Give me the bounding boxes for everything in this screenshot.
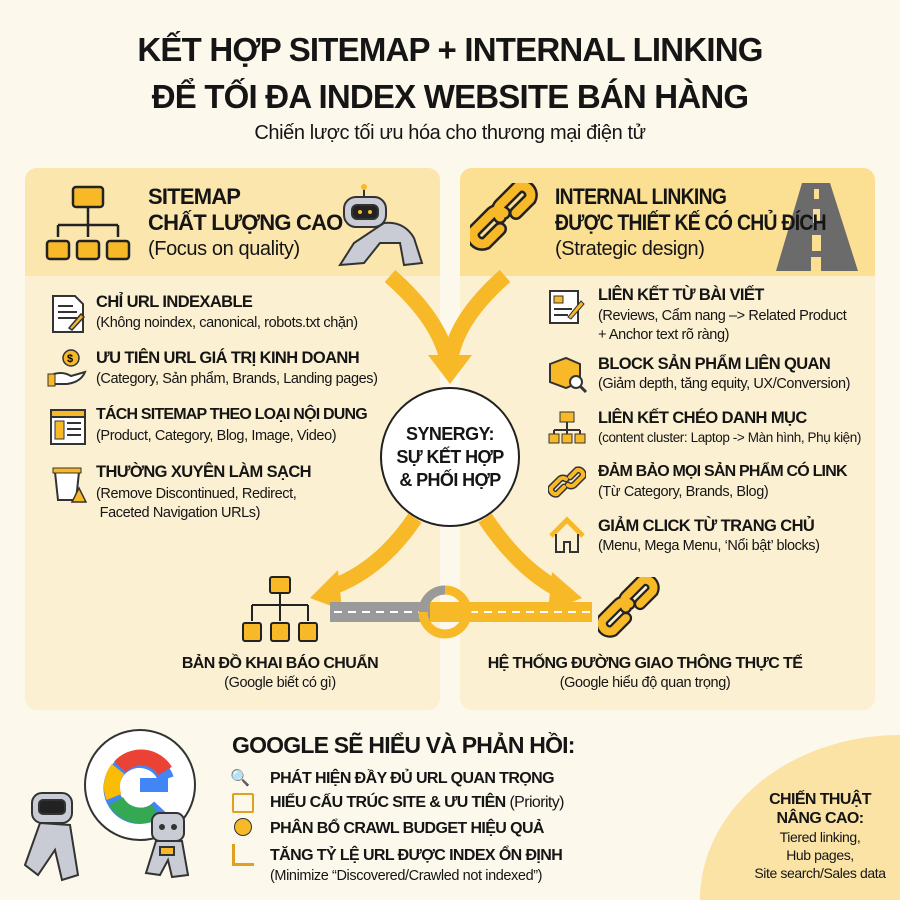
synergy circle: SỰ KẾT HỢP [396,446,504,466]
icon: trash warning [52,468,87,503]
list: HIỂU CẤU TRÚC SITE & ƯU TIÊN (Priority) [270,794,564,811]
title: ĐỂ TỐI ĐA INDEX WEBSITE BÁN HÀNG [152,78,748,115]
synergy circle: SYNERGY: [406,424,494,444]
item: cross category: (content cluster: Laptop -> Màn hình, Phụ kiện) [598,430,861,445]
corner circle: advanced tactics [700,735,900,900]
icon: house [549,516,585,553]
road [330,590,592,634]
subtitle: Chiến lược tối ưu hóa cho thương mại điện tử [254,122,646,144]
item: fewer clicks: GIẢM CLICK TỪ TRANG CHỦ [598,517,814,535]
item: fewer clicks [549,516,820,554]
text: (Focus on quality) [148,238,300,260]
panel: internal linking [460,168,875,710]
item: every product linked [548,462,848,500]
item: from articles: LIÊN KẾT TỪ BÀI VIẾT [598,286,764,304]
list [230,768,564,884]
label: sitemap declaration [182,654,378,691]
heading: GOOGLE SẼ HIỂU VÀ PHẢN HỒI: [232,732,575,758]
icon: tree [548,412,586,444]
item: every product linked: (Từ Category, Brands, Blog) [598,484,768,500]
corner circle: advanced tactics: NÂNG CAO: [776,810,864,827]
list: 🔍 [230,770,250,787]
heading: sitemap: CHẤT LƯỢNG CAO [148,210,342,235]
illustration: google with robots [24,729,196,882]
item: cleanup: THƯỜNG XUYÊN LÀM SẠCH [96,463,311,481]
title [137,31,763,115]
item: split sitemap [50,404,367,445]
item: cross category [548,408,861,445]
icon: robot crawling [338,184,424,266]
corner circle: advanced tactics: Hub pages, [786,847,854,863]
list: TĂNG TỶ LỆ URL ĐƯỢC INDEX ỔN ĐỊNH [270,847,562,864]
item: related products: (Giảm depth, tăng equity, UX/Conversion) [598,376,850,392]
item: indexable [52,292,358,333]
item: split sitemap: TÁCH SITEMAP THEO LOẠI NỘI DUNG [96,406,367,423]
corner circle: advanced tactics: Tiered linking, [780,829,860,845]
list: PHÁT HIỆN ĐẦY ĐỦ URL QUAN TRỌNG [270,770,554,787]
text: (Strategic design) [555,238,705,260]
item: split sitemap: (Product, Category, Blog, Image, Video) [96,428,336,444]
icon: chain bottom [598,577,660,638]
item: from articles: (Reviews, Cẩm nang –> Related Product [598,308,846,324]
label: traffic system: HỆ THỐNG ĐƯỜNG GIAO THÔNG THỰC TẾ [488,655,802,672]
item: business value: (Category, Sản phẩm, Brands, Landing pages) [96,371,378,387]
heading: sitemap: SITEMAP [148,184,240,209]
label: sitemap declaration: BẢN ĐỒ KHAI BÁO CHUẨN [182,655,378,672]
list: PHÂN BỔ CRAWL BUDGET HIỆU QUẢ [270,820,544,837]
icon: browser [50,409,86,445]
item: indexable: CHỈ URL INDEXABLE [96,293,252,311]
synergy circle: & PHỐI HỢP [399,470,501,490]
linking items [548,285,861,554]
label: traffic system: (Google hiểu độ quan trọng) [560,675,730,691]
header band [460,168,875,276]
corner circle: advanced tactics: Site search/Sales data [754,865,886,881]
icon: road [776,183,858,271]
heading: internal linking [555,184,826,235]
panel: sitemap [25,168,440,710]
label: traffic system [488,654,802,691]
icon: sitemap tree header [46,186,130,260]
arrow heads [310,355,582,612]
icon: article pen [549,290,585,324]
icon: document [52,295,85,333]
item: cleanup: Faceted Navigation URLs) [100,505,260,521]
item: fewer clicks: (Menu, Mega Menu, ‘Nổi bật’ blocks) [598,538,820,554]
heading: internal linking: ĐƯỢC THIẾT KẾ CÓ CHỦ ĐÍCH [555,210,826,235]
item: from articles: + Anchor text rõ ràng) [598,327,729,343]
item: business value: ƯU TIÊN URL GIÁ TRỊ KINH DOANH [96,349,359,367]
section: google response [230,732,575,884]
arrows [330,276,560,590]
icon: box search [549,356,587,393]
item: business value [48,348,378,387]
icon: sitemap tree bottom [242,576,318,642]
heading: internal linking: INTERNAL LINKING [555,184,726,209]
synergy circle [380,387,520,527]
heading: sitemap [148,184,342,235]
item: related products: BLOCK SẢN PHẨM LIÊN QUAN [598,355,830,373]
corner circle: advanced tactics: CHIẾN THUẬT [769,791,871,808]
icon: coin hand: $ [67,353,73,365]
item: every product linked: ĐẢM BẢO MỌI SẢN PHẨM CÓ LINK [598,463,847,480]
icon: chain [548,466,586,498]
icon: coin hand [48,349,87,386]
sitemap items [48,292,378,521]
item: indexable: (Không noindex, canonical, robots.txt chặn) [96,315,358,331]
item: cross category: LIÊN KẾT CHÉO DANH MỤC [598,409,807,427]
item: from articles [549,285,847,343]
list: (Minimize “Discovered/Crawled not indexed”) [270,868,542,884]
title: KẾT HỢP SITEMAP + INTERNAL LINKING [137,31,763,68]
label: sitemap declaration: (Google biết có gì) [224,675,336,691]
item: related products [549,354,850,393]
header band [25,168,440,276]
item: cleanup: (Remove Discontinued, Redirect, [96,486,296,502]
icon: chain header [470,183,538,251]
item: cleanup [52,462,311,521]
